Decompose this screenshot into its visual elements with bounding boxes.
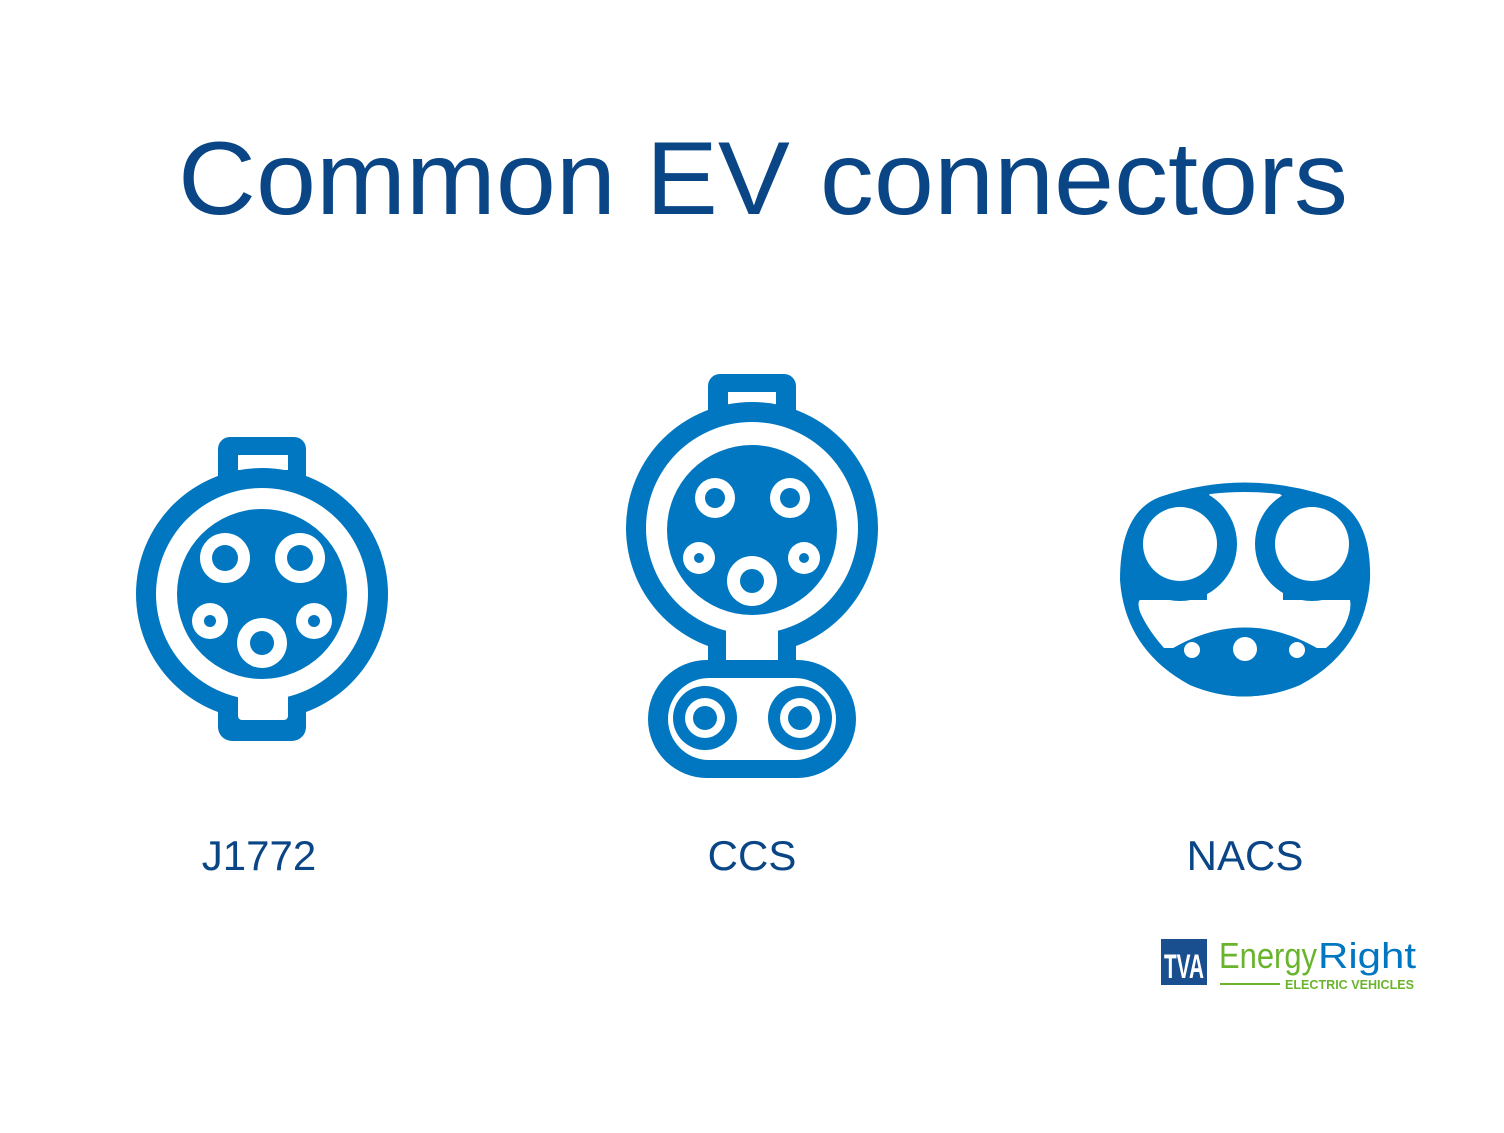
logo: TVA EnergyRight — [1161, 935, 1416, 992]
logo: TVA EnergyRight: Energy — [1219, 935, 1317, 976]
icon: J1772 connector — [136, 437, 388, 741]
title: Common EV connectors — [178, 121, 1348, 237]
label: NACS: NACS — [1187, 832, 1303, 879]
label: J1772: J1772 — [202, 832, 316, 879]
logo: TVA EnergyRight: Right — [1318, 935, 1416, 976]
logo: TVA EnergyRight: TVA — [1164, 948, 1204, 986]
icon: NACS connector — [1120, 482, 1370, 696]
logo: TVA EnergyRight: ELECTRIC VEHICLES — [1285, 977, 1414, 992]
label: CCS: CCS — [708, 832, 796, 879]
icon: CCS connector — [626, 374, 878, 778]
